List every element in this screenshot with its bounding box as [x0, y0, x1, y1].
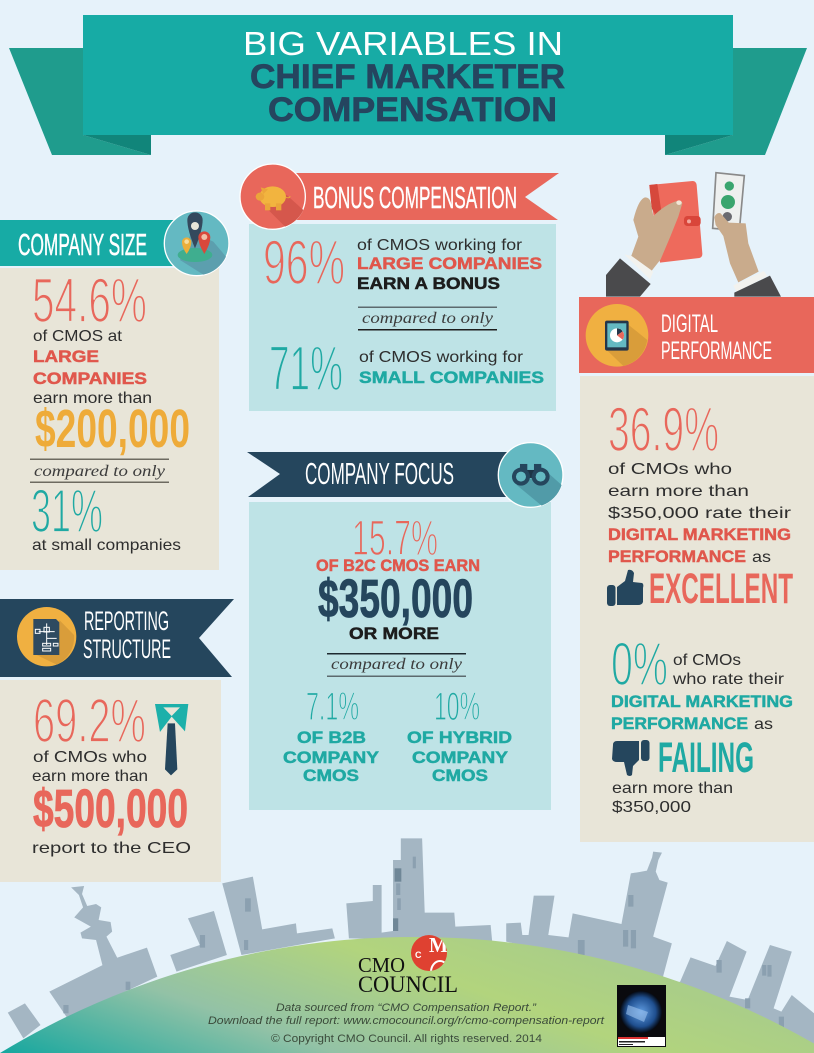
text: of B2C CMOs earn: OF B2C CMOS EARN	[316, 556, 480, 575]
text: of CMOs who rate: of CMOs	[673, 652, 741, 669]
stat: 69.2%: 69.2%	[33, 687, 146, 756]
compared to only	[327, 653, 466, 677]
stat: B2B: 7.1%	[306, 685, 359, 729]
text: large companies earn a bonus: EARN A BONUS	[357, 274, 500, 293]
logo: CMO Council: M	[429, 933, 448, 957]
text: large companies: LARGE	[33, 347, 99, 366]
stat: 96%: 96%	[263, 228, 345, 298]
stat: hybrid: 10%	[434, 685, 480, 729]
stat: 0%: 0%	[611, 630, 668, 698]
reporting structure banner	[0, 599, 234, 677]
text: large companies earn a bonus: of CMOS working for	[357, 237, 523, 254]
icon: thumbs up	[607, 570, 643, 606]
panel: bonus compensation	[240, 164, 559, 411]
stat: 71%: 71%	[269, 334, 343, 404]
company focus banner	[247, 452, 515, 497]
text: earn more than	[612, 780, 733, 816]
panel: company focus	[247, 443, 563, 810]
title text	[243, 25, 565, 129]
text: of CMOs who earn: DIGITAL MARKETING	[608, 525, 791, 544]
panel: digital performance	[579, 297, 814, 842]
text: of CMOs who rate: as	[754, 716, 773, 733]
text: of CMOs who earn	[608, 461, 792, 566]
title text: COMPENSATION	[268, 91, 557, 129]
text: of CMOs who: of CMOs who	[33, 749, 147, 766]
text: of CMOs who earn: of CMOs who	[608, 461, 732, 478]
text: of CMOs who	[32, 749, 148, 785]
text: large companies earn a bonus	[357, 237, 542, 293]
text: or more: OR MORE	[349, 624, 439, 643]
text: large companies	[33, 328, 152, 407]
stat: hybrid: CMOS	[432, 766, 488, 785]
stat: hybrid: COMPANY	[412, 748, 509, 767]
company size banner: COMPANY SIZE	[18, 227, 147, 262]
panel: company size	[0, 211, 229, 570]
panel: reporting structure	[0, 599, 234, 882]
green hill	[0, 937, 814, 1053]
compared to only: compared to only	[34, 463, 166, 480]
stat: $200,000: $200,000	[35, 399, 190, 459]
text: of CMOs who earn: PERFORMANCE	[608, 547, 746, 566]
icon: tablet chart	[586, 304, 648, 367]
stat: B2B: OF B2B	[297, 728, 366, 747]
bonus banner: BONUS COMPENSATION	[313, 180, 517, 215]
text: earn more than: earn more than	[612, 780, 733, 797]
stat: 31%: 31%	[31, 477, 103, 545]
footer text: Download the full report: www.cmocouncil.org/r/cmo-compensation-report	[208, 1015, 605, 1027]
reporting structure banner: REPORTING	[84, 606, 169, 636]
text: of CMOs who rate: PERFORMANCE	[611, 714, 748, 733]
stat: B2B: CMOS	[303, 766, 359, 785]
skyline windows	[63, 857, 784, 1028]
compared to only: compared to only	[331, 656, 463, 673]
bonus banner	[296, 173, 559, 220]
text: of CMOs who rate: DIGITAL MARKETING	[611, 692, 793, 711]
stat: B2B: COMPANY	[283, 748, 380, 767]
text: earn more than: $350,000	[612, 799, 691, 816]
text: small companies	[359, 349, 544, 387]
text: of CMOs who: earn more than	[32, 768, 148, 785]
text: of CMOs who earn: earn more than	[608, 483, 749, 500]
reporting structure banner: STRUCTURE	[83, 634, 171, 664]
icon: binoculars	[498, 443, 563, 507]
text: large companies earn a bonus: LARGE COMPANIES	[357, 254, 542, 273]
compared to only	[30, 458, 169, 483]
digital performance banner	[579, 297, 814, 373]
skyline	[8, 838, 814, 1048]
text: report to the CEO: report to the CEO	[32, 840, 191, 857]
footer text: © Copyright CMO Council. All rights reserved. 2014	[271, 1033, 542, 1045]
logo: CMO Council: COUNCIL	[358, 972, 458, 997]
logo: CMO Council: C	[415, 950, 422, 960]
icon: flowchart	[17, 607, 76, 666]
stat: B2B	[283, 685, 380, 785]
icon: map pins	[164, 211, 229, 276]
text: at small companies: at small companies	[32, 537, 181, 554]
footer text	[208, 1002, 605, 1045]
stat: 54.6%: 54.6%	[32, 266, 147, 336]
text: of CMOs who rate: who rate their	[672, 671, 785, 688]
text: large companies: of CMOS at	[33, 328, 123, 345]
stat: 15.7%: 15.7%	[352, 510, 438, 566]
text: small companies: SMALL COMPANIES	[359, 368, 544, 387]
digital performance banner: DIGITAL	[661, 310, 718, 338]
icon: tie	[155, 704, 188, 775]
stat: $500,000: $500,000	[33, 779, 188, 839]
icon: piggy bank	[240, 164, 305, 229]
text: of CMOs who earn: as	[752, 549, 771, 566]
icon: thumbs down	[612, 740, 650, 776]
stat: hybrid: OF HYBRID	[407, 728, 512, 747]
stat: 36.9%: 36.9%	[608, 395, 719, 465]
text: small companies: of CMOS working for	[359, 349, 524, 366]
compared to only	[358, 306, 497, 330]
title text: CHIEF MARKETER	[250, 58, 565, 96]
report cover	[617, 985, 666, 1047]
text: large companies: COMPANIES	[33, 369, 147, 388]
logo: CMO Council: CMO	[358, 953, 405, 977]
company focus banner: COMPANY FOCUS	[305, 456, 454, 491]
footer text: Data sourced from “CMO Compensation Report.”	[276, 1002, 537, 1014]
title text: BIG VARIABLES IN	[243, 25, 563, 62]
illustration: hands with wallet and cash	[606, 173, 781, 297]
text: of CMOs who rate	[611, 652, 793, 733]
stat: hybrid	[407, 685, 512, 785]
compared to only: compared to only	[362, 310, 494, 327]
text: large companies: earn more than	[33, 390, 152, 407]
stat: $350,000: $350,000	[318, 569, 473, 629]
title banner	[9, 15, 807, 155]
logo: CMO Council	[358, 935, 457, 992]
company size banner	[0, 220, 175, 266]
text: of CMOs who earn: $350,000 rate their	[608, 505, 792, 522]
